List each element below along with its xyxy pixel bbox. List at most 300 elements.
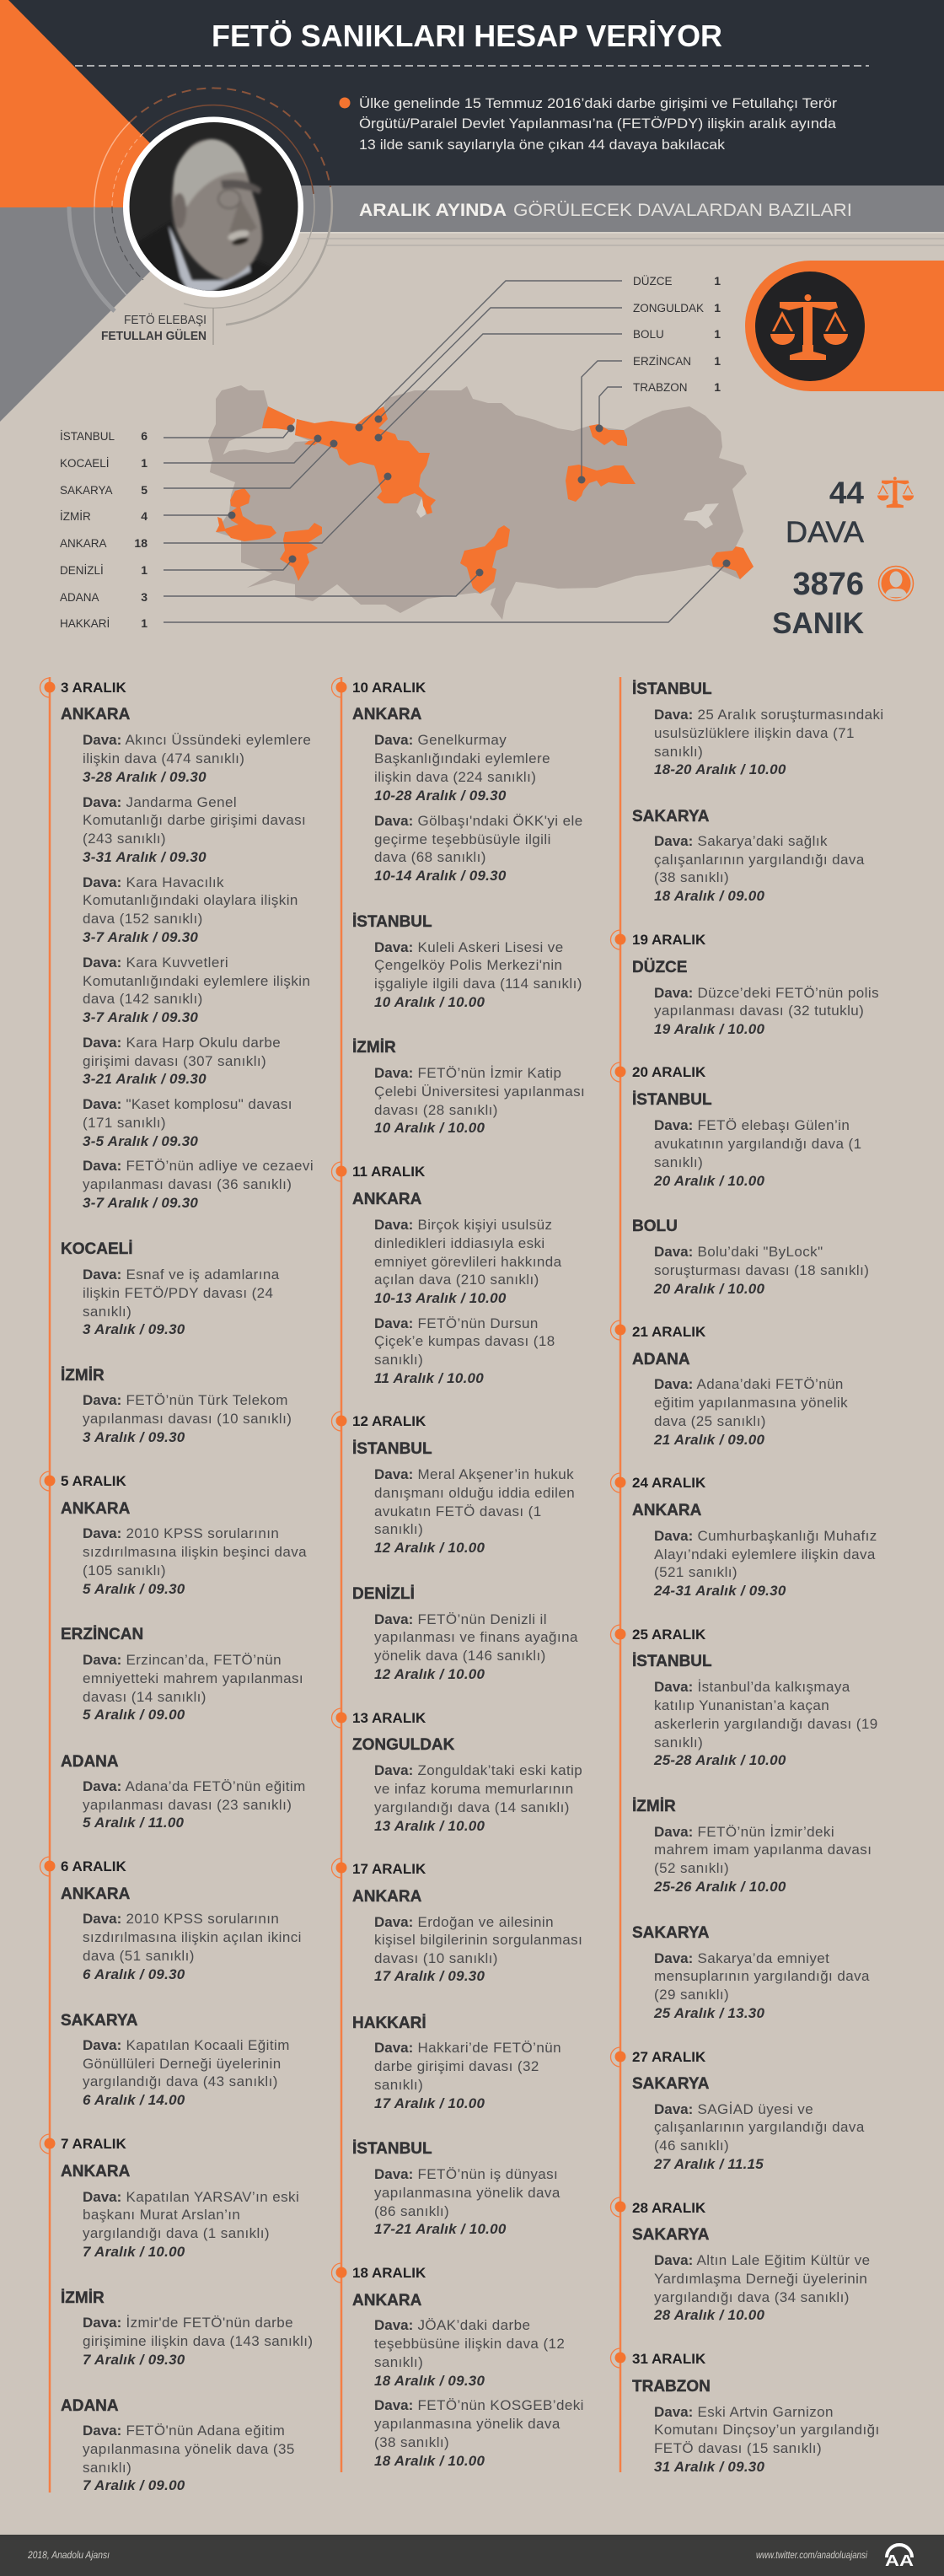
date: 5 Aralık: 5 Aralık / 11.00 bbox=[83, 1815, 185, 1831]
date: 18 Aralık: 18 Aralık / 09.30 bbox=[374, 2373, 485, 2389]
date: 10 Aralık: işgaliyle ilgili dava (114 sanıklı) bbox=[374, 976, 582, 992]
stat: 44 dava: DAVA bbox=[786, 516, 865, 549]
date: 11 Aralık: açılan dava (210 sanıklı) bbox=[374, 1272, 539, 1288]
date: 3 Aralık bbox=[61, 680, 314, 1445]
date: 5 Aralık: davası (14 sanıklı) bbox=[83, 1689, 206, 1705]
footer: www.twitter.com/anadoluajansi bbox=[756, 2551, 867, 2561]
schedule column 1 bbox=[61, 680, 314, 2493]
date: 20 Aralık: soruşturması davası (18 sanıklı) bbox=[654, 1262, 869, 1278]
date: 17 Aralık: darbe girişimi davası (32 bbox=[374, 2058, 539, 2074]
date: 18 Aralık continued bbox=[632, 680, 884, 904]
date: 10 Aralık: 10 Aralık / 10.00 bbox=[374, 994, 485, 1010]
date: 31 Aralık bbox=[632, 2351, 880, 2475]
date: 11 Aralık: ANKARA bbox=[352, 1191, 422, 1208]
date: 18 Aralık continued: SAKARYA bbox=[632, 808, 710, 826]
date: 18 Aralık continued: sanıklı) bbox=[654, 744, 703, 760]
date: 13 Aralık: ve infaz koruma memurlarının bbox=[374, 1781, 574, 1797]
date: 18 Aralık: Dava: FETÖ’nün KOSGEB’deki bbox=[374, 2397, 584, 2413]
footer bbox=[0, 2535, 944, 2576]
map labels: left: DENİZLİ bbox=[60, 564, 104, 577]
date: 25 Aralık: 25-26 Aralık / 10.00 bbox=[653, 1879, 786, 1895]
date: 25 Aralık: (52 sanıklı) bbox=[654, 1860, 729, 1876]
date: 3 Aralık: 3-5 Aralık / 09.30 bbox=[83, 1133, 198, 1149]
date: 10 Aralık: 10-14 Aralık / 09.30 bbox=[374, 868, 507, 884]
date: 25 Aralık: mensuplarının yargılandığı dava bbox=[654, 1968, 870, 1984]
date: 21 Aralık: Dava: Adana’daki FETÖ’nün bbox=[654, 1376, 844, 1392]
stat: 3876 sanık: SANIK bbox=[772, 607, 864, 640]
map labels: left: 5 bbox=[141, 483, 148, 497]
map labels: left: ANKARA bbox=[60, 537, 107, 550]
icon: person bbox=[878, 567, 914, 600]
date: 5 Aralık: yapılanması davası (23 sanıklı) bbox=[83, 1797, 292, 1813]
date: 5 Aralık: ANKARA bbox=[61, 1500, 131, 1518]
date: 7 Aralık: ANKARA bbox=[61, 2163, 131, 2181]
date: 3 Aralık: Dava: FETÖ’nün adliye ve cezaevi bbox=[83, 1158, 314, 1174]
date: 17 Aralık: Dava: FETÖ’nün iş dünyası bbox=[374, 2166, 558, 2182]
date: 21 Aralık: ADANA bbox=[632, 1351, 690, 1369]
date: 3 Aralık: yapılanması davası (10 sanıklı) bbox=[83, 1411, 292, 1427]
date: 3 Aralık: Dava: Akıncı Üssündeki eylemlere bbox=[83, 732, 311, 748]
date: 10 Aralık: İZMİR bbox=[352, 1039, 396, 1057]
date: 5 Aralık: Dava: Adana’da FETÖ’nün eğitim bbox=[83, 1778, 306, 1794]
date: 25 Aralık: sanıklı) bbox=[654, 1734, 703, 1750]
intro text: 13 ilde sanık sayılarıyla öne çıkan 44 davaya bakılacak bbox=[359, 137, 726, 153]
date: 27 Aralık: Dava: SAGİAD üyesi ve bbox=[654, 2101, 813, 2117]
date: 19 Aralık: DÜZCE bbox=[632, 959, 687, 976]
date: 25 Aralık: SAKARYA bbox=[632, 1924, 710, 1942]
date: 12 Aralık: danışmanı olduğu iddia edilen bbox=[374, 1485, 575, 1501]
date: 18 Aralık continued: Dava: Sakarya’daki sağlık bbox=[654, 833, 828, 849]
date: 6 Aralık: ANKARA bbox=[61, 1885, 131, 1903]
date: 11 Aralık: 11 ARALIK bbox=[352, 1164, 426, 1180]
date: 6 Aralık: yargılandığı dava (43 sanıklı) bbox=[83, 2073, 278, 2089]
map labels: right bbox=[633, 274, 721, 394]
date: 27 Aralık: 27 Aralık / 11.15 bbox=[653, 2156, 764, 2172]
date: 25 Aralık: İSTANBUL bbox=[632, 1653, 712, 1670]
map labels: right: BOLU bbox=[633, 328, 664, 341]
location dots bbox=[228, 415, 730, 577]
date: 18 Aralık: 18 Aralık / 10.00 bbox=[374, 2453, 485, 2469]
date: 10 Aralık: Dava: FETÖ’nün İzmir Katip bbox=[374, 1065, 561, 1081]
date: 10 Aralık: Dava: Gölbaşı'ndaki ÖKK'yi ele bbox=[374, 813, 583, 829]
date: 10 Aralık: Çelebi Üniversitesi yapılanması bbox=[374, 1084, 585, 1100]
map labels: left: 1 bbox=[141, 616, 148, 630]
date: 19 Aralık: Dava: Düzce’deki FETÖ’nün polis bbox=[654, 985, 879, 1001]
date: 7 Aralık: Dava: İzmir'de FETÖ'nün darbe bbox=[83, 2315, 293, 2331]
date: 7 Aralık: 7 Aralık / 09.30 bbox=[83, 2352, 185, 2368]
date: 3 Aralık: Komutanlığındaki eylemlere ilişkin bbox=[83, 973, 310, 989]
stat: 44 dava: 44 bbox=[829, 476, 864, 510]
date: 18 Aralık: Dava: JÖAK’daki darbe bbox=[374, 2317, 530, 2333]
date: 7 Aralık: ADANA bbox=[61, 2397, 119, 2415]
date: 5 Aralık: Dava: Erzincan’da, FETÖ’nün bbox=[83, 1652, 282, 1668]
date: 27 Aralık: çalışanlarının yargılandığı dava bbox=[654, 2119, 865, 2135]
date: 3 Aralık: yapılanması davası (36 sanıklı) bbox=[83, 1176, 292, 1192]
date: 13 Aralık: Dava: Zonguldak’taki eski katip bbox=[374, 1762, 582, 1778]
date: 3 Aralık: Komutanlığı darbe girişimi davası bbox=[83, 812, 306, 828]
date: 18 Aralık: ANKARA bbox=[352, 2292, 422, 2310]
date: 20 Aralık: Dava: FETÖ elebaşı Gülen’in bbox=[654, 1117, 850, 1133]
date: 11 Aralık: 10-13 Aralık / 10.00 bbox=[374, 1290, 507, 1306]
date: 28 Aralık: Dava: Altın Lale Eğitim Kültür ve bbox=[654, 2252, 871, 2268]
date: 18 Aralık bbox=[352, 2265, 584, 2469]
portrait of Fetullah Gülen bbox=[123, 116, 303, 297]
date: 3 Aralık: Dava: "Kaset komplosu" davası bbox=[83, 1096, 292, 1112]
date: 17 Aralık: (86 sanıklı) bbox=[374, 2203, 449, 2219]
date: 3 Aralık: Dava: Kara Havacılık bbox=[83, 874, 224, 890]
date: 31 Aralık: 31 ARALIK bbox=[632, 2351, 706, 2367]
date: 28 Aralık: 28 Aralık / 10.00 bbox=[653, 2307, 765, 2323]
schedule column 2 bbox=[352, 680, 585, 2469]
date: 3 Aralık: 3 ARALIK bbox=[61, 680, 126, 696]
date: 17 Aralık: 17-21 Aralık / 10.00 bbox=[374, 2221, 507, 2237]
date: 3 Aralık: İZMİR bbox=[61, 1367, 105, 1385]
date: 25 Aralık: katılıp Yunanistan’a kaçan bbox=[654, 1697, 829, 1713]
date: 3 Aralık: dava (142 sanıklı) bbox=[83, 991, 203, 1007]
date: 24 Aralık: Alayı’ndaki eylemlere ilişkin dava bbox=[654, 1546, 876, 1562]
date: 11 Aralık: emniyet görevlileri hakkında bbox=[374, 1254, 562, 1270]
date: 7 Aralık: girişimine ilişkin dava (143 sanıklı) bbox=[83, 2333, 313, 2349]
intro text bbox=[339, 95, 837, 153]
date: 31 Aralık: Komutanı Dinçsoy’un yargılandığı bbox=[654, 2422, 880, 2438]
footer: 2018, Anadolu Ajansı bbox=[27, 2551, 110, 2561]
date: 11 Aralık: 11 Aralık / 10.00 bbox=[374, 1370, 484, 1386]
panel: scales badge bbox=[745, 261, 944, 391]
date: 18 Aralık continued: 18 Aralık / 09.00 bbox=[654, 888, 765, 904]
date: 25 Aralık: 25 Aralık / 13.30 bbox=[653, 2005, 765, 2021]
date: 3 Aralık: 3 Aralık / 09.30 bbox=[83, 1429, 185, 1445]
date: 19 Aralık bbox=[632, 932, 879, 1037]
map labels: right: 1 bbox=[714, 354, 721, 368]
date: 17 Aralık: sanıklı) bbox=[374, 2077, 423, 2093]
date: 5 Aralık: (105 sanıklı) bbox=[83, 1562, 166, 1578]
date: 13 Aralık: yargılandığı dava (14 sanıklı) bbox=[374, 1799, 570, 1815]
date: 5 Aralık: ERZİNCAN bbox=[61, 1626, 143, 1643]
date: 7 Aralık: 7 Aralık / 09.00 bbox=[83, 2477, 185, 2493]
section heading: ARALIK AYINDA bbox=[359, 201, 507, 220]
date: 7 Aralık: yargılandığı dava (1 sanıklı) bbox=[83, 2225, 270, 2241]
date: 7 Aralık: sanıklı) bbox=[83, 2460, 131, 2476]
section heading: GÖRÜLECEK DAVALARDAN BAZILARI bbox=[513, 201, 852, 220]
date: 3 Aralık: dava (152 sanıklı) bbox=[83, 911, 203, 927]
date: 17 Aralık: Dava: Erdoğan ve ailesinin bbox=[374, 1914, 554, 1930]
date: 18 Aralık continued: usulsüzlüklere ilişkin dava (71 bbox=[654, 725, 855, 741]
date: 18 Aralık continued: 18-20 Aralık / 10.00 bbox=[654, 761, 786, 777]
date: 6 Aralık: 6 Aralık / 09.30 bbox=[83, 1966, 185, 1982]
date: 3 Aralık: Dava: Jandarma Genel bbox=[83, 794, 237, 810]
date: 3 Aralık: Dava: Esnaf ve iş adamlarına bbox=[83, 1266, 280, 1283]
caption: FETÖ elebaşı: FETÖ ELEBAŞI bbox=[124, 312, 206, 327]
date: 6 Aralık: Dava: Kapatılan Kocaali Eğitim bbox=[83, 2037, 290, 2053]
date: 17 Aralık: İSTANBUL bbox=[352, 2140, 432, 2158]
map labels: right: 1 bbox=[714, 274, 721, 288]
date: 12 Aralık bbox=[352, 1413, 578, 1682]
map base bbox=[208, 385, 754, 620]
date: 3 Aralık: Komutanlığındaki olaylara ilişkin bbox=[83, 892, 298, 908]
map of Turkey bbox=[164, 281, 754, 622]
date: 21 Aralık: 21 Aralık / 09.00 bbox=[653, 1432, 765, 1448]
date: 17 Aralık: kişisel bilgilerinin sorgulanması bbox=[374, 1932, 582, 1948]
map labels: left: 1 bbox=[141, 456, 148, 470]
date: 20 Aralık: 20 Aralık / 10.00 bbox=[653, 1281, 765, 1297]
date: 18 Aralık: 18 ARALIK bbox=[352, 2265, 426, 2281]
date: 28 Aralık bbox=[632, 2200, 871, 2323]
date: 12 Aralık: 12 Aralık / 10.00 bbox=[374, 1666, 485, 1682]
icon: AA logo bbox=[885, 2545, 914, 2569]
date: 17 Aralık: 17 Aralık / 10.00 bbox=[374, 2095, 485, 2111]
date: 3 Aralık: girişimi davası (307 sanıklı) bbox=[83, 1053, 266, 1069]
stat: 3876 sanık: 3876 bbox=[792, 567, 864, 602]
stat: 44 dava bbox=[786, 476, 914, 549]
date: 28 Aralık: yargılandığı dava (34 sanıklı) bbox=[654, 2289, 850, 2305]
date: 5 Aralık: 5 Aralık / 09.30 bbox=[83, 1581, 185, 1597]
date: 10 Aralık: 10 ARALIK bbox=[352, 680, 426, 696]
date: 25 Aralık: 25 ARALIK bbox=[632, 1627, 706, 1643]
date: 3 Aralık: 3-7 Aralık / 09.30 bbox=[83, 1195, 198, 1211]
date: 3 Aralık: Dava: FETÖ’nün Türk Telekom bbox=[83, 1392, 288, 1408]
date: 10 Aralık bbox=[352, 680, 585, 1136]
highlighted provinces bbox=[216, 406, 754, 594]
date: 10 Aralık: Çengelköy Polis Merkezi'nin bbox=[374, 957, 562, 973]
date: 12 Aralık: İSTANBUL bbox=[352, 1440, 432, 1458]
title: FETÖ SANIKLARI HESAP VERİYOR bbox=[212, 19, 722, 53]
date: 13 Aralık bbox=[352, 1710, 582, 1834]
date: 24 Aralık: ANKARA bbox=[632, 1502, 702, 1519]
date: 10 Aralık: Dava: Genelkurmay bbox=[374, 732, 507, 748]
date: 17 Aralık: davası (10 sanıklı) bbox=[374, 1950, 498, 1966]
date: 20 Aralık: BOLU bbox=[632, 1218, 678, 1235]
date: 20 Aralık: İSTANBUL bbox=[632, 1091, 712, 1109]
stat: 3876 sanık bbox=[772, 567, 914, 640]
date: 28 Aralık: Yardımlaşma Derneği üyelerinin bbox=[654, 2271, 867, 2287]
date: 11 Aralık: Dava: FETÖ’nün Dursun bbox=[374, 1315, 539, 1331]
map labels: right: ZONGULDAK bbox=[633, 302, 704, 315]
date: 11 Aralık: sanıklı) bbox=[374, 1352, 423, 1368]
date: 7 Aralık bbox=[61, 2136, 313, 2493]
date: 10 Aralık: İSTANBUL bbox=[352, 913, 432, 931]
date: 17 Aralık: HAKKARİ bbox=[352, 2014, 426, 2032]
date: 3 Aralık: KOCAELİ bbox=[61, 1240, 133, 1258]
date: 19 Aralık: 19 ARALIK bbox=[632, 932, 706, 948]
date: 11 Aralık: Dava: Birçok kişiyi usulsüz bbox=[374, 1217, 552, 1233]
leader lines bbox=[164, 281, 727, 622]
date: 18 Aralık: (38 sanıklı) bbox=[374, 2434, 449, 2450]
date: 20 Aralık: sanıklı) bbox=[654, 1154, 703, 1170]
date: 27 Aralık bbox=[632, 2049, 865, 2172]
date: 12 Aralık: yönelik dava (146 sanıklı) bbox=[374, 1648, 546, 1664]
date: 17 Aralık: 17 ARALIK bbox=[352, 1861, 426, 1877]
date: 18 Aralık continued: (38 sanıklı) bbox=[654, 869, 729, 885]
date: 10 Aralık: 10 Aralık / 10.00 bbox=[374, 1120, 485, 1136]
date: 20 Aralık: 20 ARALIK bbox=[632, 1064, 706, 1080]
map labels: right: ERZİNCAN bbox=[633, 355, 691, 368]
date: 17 Aralık: Dava: Hakkari’de FETÖ’nün bbox=[374, 2040, 561, 2056]
date: 3 Aralık: Dava: Kara Kuvvetleri bbox=[83, 955, 228, 971]
date: 11 Aralık bbox=[352, 1164, 562, 1386]
date: 24 Aralık: 24-31 Aralık / 09.30 bbox=[653, 1583, 786, 1599]
date: 25 Aralık: İZMİR bbox=[632, 1798, 676, 1815]
date: 31 Aralık: FETÖ davası (15 sanıklı) bbox=[654, 2440, 822, 2456]
date: 24 Aralık: Dava: Cumhurbaşkanlığı Muhafız bbox=[654, 1528, 877, 1544]
date: 3 Aralık: 3-28 Aralık / 09.30 bbox=[83, 769, 206, 785]
date: 6 Aralık: SAKARYA bbox=[61, 2012, 138, 2030]
date: 3 Aralık: Dava: Kara Harp Okulu darbe bbox=[83, 1035, 281, 1051]
icon: small scales bbox=[877, 476, 914, 508]
date: 5 Aralık: 5 ARALIK bbox=[61, 1473, 126, 1489]
map labels: left: ADANA bbox=[60, 591, 99, 604]
map labels: left bbox=[60, 429, 148, 630]
date: 6 Aralık: Gönüllüleri Derneği üyelerinin bbox=[83, 2056, 282, 2072]
date: 12 Aralık: yapılanması ve finans ayağına bbox=[374, 1629, 578, 1645]
date: 7 Aralık: Dava: Kapatılan YARSAV’ın eski bbox=[83, 2189, 299, 2205]
date: 25 Aralık: 25-28 Aralık / 10.00 bbox=[653, 1752, 786, 1768]
date: 25 Aralık: Dava: İstanbul’da kalkışmaya bbox=[654, 1679, 850, 1695]
map labels: left: 6 bbox=[141, 429, 148, 443]
date: 20 Aralık: avukatının yargılandığı dava (1 bbox=[654, 1136, 861, 1152]
date: 27 Aralık: SAKARYA bbox=[632, 2075, 710, 2093]
date: 5 Aralık: Dava: 2010 KPSS sorularının bbox=[83, 1525, 279, 1541]
date: 12 Aralık: 12 ARALIK bbox=[352, 1413, 426, 1429]
date: 3 Aralık: ANKARA bbox=[61, 706, 131, 723]
date: 24 Aralık: (521 sanıklı) bbox=[654, 1564, 738, 1580]
date: 11 Aralık: Çiçek’e kumpas davası (18 bbox=[374, 1333, 555, 1349]
date: 24 Aralık: 24 ARALIK bbox=[632, 1475, 706, 1491]
date: 3 Aralık: sanıklı) bbox=[83, 1304, 131, 1320]
decorative rings bbox=[69, 88, 944, 345]
date: 6 Aralık: sızdırılmasına ilişkin açılan ikinci bbox=[83, 1929, 302, 1945]
date: 3 Aralık: (171 sanıklı) bbox=[83, 1115, 166, 1131]
date: 7 Aralık: 7 ARALIK bbox=[61, 2136, 126, 2152]
date: 21 Aralık: 21 ARALIK bbox=[632, 1324, 706, 1340]
date: 17 Aralık: yapılanmasına yönelik dava bbox=[374, 2185, 560, 2201]
date: 7 Aralık: yapılanmasına yönelik dava (35 bbox=[83, 2441, 295, 2457]
date: 31 Aralık: Dava: Eski Artvin Garnizon bbox=[654, 2404, 834, 2420]
date: 25 Aralık: Dava: FETÖ’nün İzmir’deki bbox=[654, 1824, 834, 1840]
section heading bbox=[359, 201, 852, 220]
date: 10 Aralık: geçirme teşebbüsüyle ilgili bbox=[374, 831, 551, 847]
map labels: left: 1 bbox=[141, 563, 148, 577]
date: 3 Aralık: 3 Aralık / 09.30 bbox=[83, 1321, 185, 1337]
date: 25 Aralık: askerlerin yargılandığı davası (19 bbox=[654, 1716, 878, 1732]
map labels: left: HAKKARİ bbox=[60, 617, 110, 630]
map labels: right: TRABZON bbox=[633, 381, 688, 394]
date: 3 Aralık: 3-7 Aralık / 09.30 bbox=[83, 1009, 198, 1025]
date: 10 Aralık: 10-28 Aralık / 09.30 bbox=[374, 788, 507, 804]
date: 5 Aralık: emniyetteki mahrem yapılanması bbox=[83, 1670, 303, 1686]
date: 31 Aralık: 31 Aralık / 09.30 bbox=[654, 2459, 765, 2475]
date: 12 Aralık: Dava: FETÖ’nün Denizli il bbox=[374, 1611, 547, 1627]
date: 27 Aralık: 27 ARALIK bbox=[632, 2049, 706, 2065]
date: 28 Aralık: 28 ARALIK bbox=[632, 2200, 706, 2216]
header band bbox=[0, 0, 944, 422]
date: 12 Aralık: sanıklı) bbox=[374, 1521, 423, 1537]
map labels: left: İZMİR bbox=[60, 510, 91, 523]
date: 3 Aralık: 3-31 Aralık / 09.30 bbox=[83, 849, 206, 865]
date: 25 Aralık: (29 sanıklı) bbox=[654, 1987, 729, 2003]
date: 6 Aralık: 6 Aralık / 14.00 bbox=[83, 2092, 185, 2108]
date: 18 Aralık: yapılanmasına yönelik dava bbox=[374, 2416, 560, 2432]
date: 13 Aralık: ZONGULDAK bbox=[352, 1736, 455, 1754]
date: 12 Aralık: Dava: Meral Akşener’in hukuk bbox=[374, 1466, 574, 1482]
intro text: Ülke genelinde 15 Temmuz 2016’daki darbe girişimi ve Fetullahçı Terör bbox=[359, 95, 837, 111]
date: 25 Aralık: mahrem imam yapılanma davası bbox=[654, 1842, 872, 1858]
date: 6 Aralık bbox=[61, 1858, 302, 2108]
date: 31 Aralık: TRABZON bbox=[632, 2378, 711, 2396]
date: 20 Aralık: Dava: Bolu’daki "ByLock" bbox=[654, 1244, 823, 1260]
date: 19 Aralık: yapılanması davası (32 tutuklu) bbox=[654, 1003, 864, 1019]
date: 27 Aralık: (46 sanıklı) bbox=[654, 2138, 729, 2154]
date: 17 Aralık: 17 Aralık / 09.30 bbox=[374, 1968, 485, 1984]
date: 28 Aralık: SAKARYA bbox=[632, 2226, 710, 2244]
map labels: left: 4 bbox=[141, 509, 148, 523]
date: 18 Aralık continued: çalışanlarının yargılandığı dava bbox=[654, 852, 865, 868]
map labels: left: 3 bbox=[141, 590, 148, 604]
date: 6 Aralık: dava (51 sanıklı) bbox=[83, 1948, 195, 1964]
date: 10 Aralık: ANKARA bbox=[352, 706, 422, 723]
date: 18 Aralık: teşebbüsüne ilişkin dava (12 bbox=[374, 2336, 565, 2352]
caption: FETÖ elebaşı: FETULLAH GÜLEN bbox=[101, 329, 206, 343]
date: 5 Aralık: 5 Aralık / 09.00 bbox=[83, 1707, 185, 1723]
map labels: right: 1 bbox=[714, 327, 721, 341]
schedule column 3 bbox=[632, 680, 884, 2475]
date: 25 Aralık bbox=[632, 1627, 878, 2021]
date: 11 Aralık: dinledikleri iddiasıyla eski bbox=[374, 1235, 545, 1251]
date: 18 Aralık continued: Dava: 25 Aralık soruşturmasındaki bbox=[654, 707, 884, 723]
date: 13 Aralık: 13 ARALIK bbox=[352, 1710, 426, 1726]
date: 3 Aralık: 3-21 Aralık / 09.30 bbox=[83, 1071, 206, 1087]
date: 10 Aralık: Dava: Kuleli Askeri Lisesi ve bbox=[374, 939, 564, 955]
date: 3 Aralık: (243 sanıklı) bbox=[83, 831, 166, 847]
date: 6 Aralık: Dava: 2010 KPSS sorularının bbox=[83, 1911, 279, 1927]
date: 18 Aralık: sanıklı) bbox=[374, 2354, 423, 2370]
date: 17 Aralık: ANKARA bbox=[352, 1888, 422, 1906]
map labels: left: 18 bbox=[134, 536, 148, 550]
timeline lines and markers bbox=[40, 677, 626, 2493]
map labels: left: KOCAELİ bbox=[60, 457, 110, 470]
date: 19 Aralık: 19 Aralık / 10.00 bbox=[654, 1021, 765, 1037]
date: 3 Aralık: ilişkin FETÖ/PDY davası (24 bbox=[83, 1285, 273, 1301]
date: 6 Aralık: 6 ARALIK bbox=[61, 1858, 126, 1874]
date: 7 Aralık: İZMİR bbox=[61, 2289, 105, 2307]
icon: scales of justice bbox=[770, 294, 848, 360]
date: 7 Aralık: başkanı Murat Arslan’ın bbox=[83, 2207, 240, 2223]
date: 5 Aralık: ADANA bbox=[61, 1753, 119, 1771]
date: 5 Aralık: sızdırılmasına ilişkin beşinci dava bbox=[83, 1544, 307, 1560]
date: 25 Aralık: Dava: Sakarya’da emniyet bbox=[654, 1950, 829, 1966]
date: 12 Aralık: avukatın FETÖ davası (1 bbox=[374, 1503, 542, 1519]
map labels: left: SAKARYA bbox=[60, 484, 113, 497]
date: 3 Aralık: ilişkin dava (474 sanıklı) bbox=[83, 750, 244, 766]
date: 12 Aralık: DENİZLİ bbox=[352, 1585, 415, 1603]
date: 12 Aralık: 12 Aralık / 10.00 bbox=[374, 1540, 485, 1556]
map labels: right: DÜZCE bbox=[633, 275, 673, 288]
date: 21 Aralık: eğitim yapılanmasına yönelik bbox=[654, 1395, 848, 1411]
date: 10 Aralık: ilişkin dava (224 sanıklı) bbox=[374, 769, 536, 785]
date: 7 Aralık: Dava: FETÖ'nün Adana eğitim bbox=[83, 2423, 285, 2439]
date: 20 Aralık: 20 Aralık / 10.00 bbox=[653, 1173, 765, 1189]
date: 10 Aralık: davası (28 sanıklı) bbox=[374, 1102, 498, 1118]
date: 10 Aralık: Başkanlığındaki eylemlere bbox=[374, 750, 550, 766]
icon: AA logo: AA bbox=[885, 2552, 914, 2569]
intro text: Örgütü/Paralel Devlet Yapılanması’na (FETÖ/PDY) ilişkin aralık ayında bbox=[359, 116, 837, 132]
date: 10 Aralık: dava (68 sanıklı) bbox=[374, 849, 486, 865]
date: 21 Aralık: dava (25 sanıklı) bbox=[654, 1413, 766, 1429]
date: 18 Aralık continued: İSTANBUL bbox=[632, 680, 712, 698]
date: 20 Aralık bbox=[632, 1064, 869, 1297]
caption: FETÖ elebaşı bbox=[101, 312, 206, 343]
map labels: right: 1 bbox=[714, 380, 721, 394]
map labels: left: İSTANBUL bbox=[60, 430, 115, 443]
